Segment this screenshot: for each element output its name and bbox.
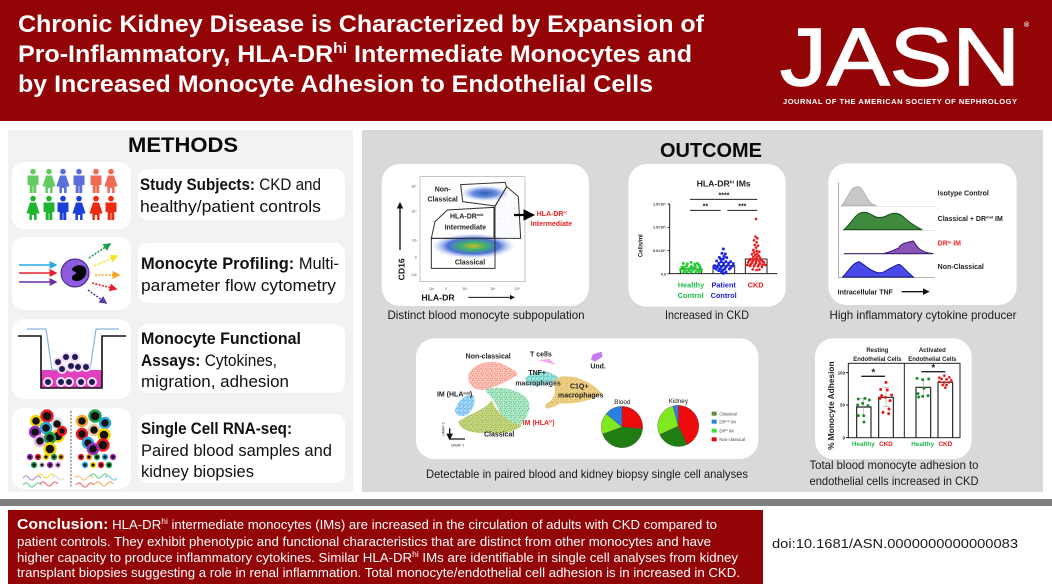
text: study subjects bbox=[140, 176, 321, 216]
title bbox=[18, 11, 705, 98]
chart: flow plot: Classical bbox=[455, 260, 485, 267]
chart: kidney pie: Kidney bbox=[669, 398, 689, 405]
chart: flow plot: 0 bbox=[415, 256, 417, 260]
title: hi bbox=[333, 40, 347, 57]
caption: adhesion bbox=[810, 458, 979, 488]
chart: HLA-DRhi IMs dot plot: *** bbox=[738, 203, 747, 210]
text: study subjects: healthy/patient controls bbox=[140, 198, 321, 216]
chart: UMAP: hi bbox=[549, 420, 552, 424]
chart: monocyte adhesion bars: Activated bbox=[919, 348, 946, 354]
conclusion box: IMs are identifiable in single cell analyses from kidney bbox=[419, 551, 739, 565]
legend: pie: IM bbox=[730, 419, 736, 424]
chart: UMAP: TNF+ bbox=[528, 370, 546, 377]
chart: blood pie bbox=[601, 399, 643, 448]
chart: monocyte adhesion bars: * bbox=[871, 368, 875, 379]
text: functional assays: Monocyte Functional bbox=[141, 330, 301, 348]
chart: intracellular TNF histograms: Isotype Control bbox=[938, 191, 989, 198]
chart: UMAP: T cells bbox=[530, 351, 552, 358]
chart: intracellular TNF histograms: Classical + DR bbox=[938, 216, 986, 223]
chart: flow plot: 10⁵ bbox=[412, 184, 417, 188]
title: Pro-Inflammatory, HLA-DR bbox=[18, 41, 320, 68]
caption: dot plot: Increased in CKD bbox=[665, 308, 749, 322]
chart: HLA-DRhi IMs dot plot: HLA-DR bbox=[697, 179, 730, 189]
text: functional assays bbox=[141, 330, 301, 391]
panel: methods bbox=[8, 130, 353, 492]
chart: UMAP: IM (HLA bbox=[523, 420, 549, 427]
chart: monocyte adhesion bars: Resting bbox=[866, 348, 889, 354]
card: UMAP and pies bbox=[416, 338, 758, 459]
card: adhesion bbox=[815, 338, 972, 459]
chart: UMAP: UMAP 1 bbox=[451, 444, 464, 448]
legend: pie: DR bbox=[719, 419, 726, 424]
chart: flow plot: hi bbox=[563, 211, 567, 215]
chart: flow plot: CD16 bbox=[396, 258, 406, 280]
chart: intracellular TNF histograms: IM bbox=[993, 216, 1003, 223]
legend: pie: hi bbox=[726, 428, 728, 432]
text: single cell RNA-seq: Paired blood samples and bbox=[141, 442, 332, 460]
chart: monocyte adhesion bars: * bbox=[931, 363, 935, 374]
chart: HLA-DRhi IMs dot plot: IMs bbox=[734, 179, 751, 189]
chart: flow plot: Classical bbox=[428, 197, 458, 204]
chart: flow plot: Intermediate bbox=[531, 221, 572, 228]
outcome heading: OUTCOME bbox=[660, 140, 762, 162]
text: single cell RNA-seq bbox=[141, 420, 332, 481]
conclusion box: intermediate monocytes (IMs) are increased in the circulation of adults with CKD compared to bbox=[168, 518, 717, 532]
chart: HLA-DRhi IMs dot plot: Control bbox=[678, 291, 704, 300]
chart: monocyte adhesion bars: CKD bbox=[938, 441, 953, 448]
chart: flow plot: HLA-DR bbox=[450, 213, 477, 220]
chart: UMAP: IM (HLA bbox=[437, 392, 463, 399]
conclusion box: transplant biopsies suggesting a role in renal inflammation. Total monocyte/endothelial cell adhesion is in increased in CKD. bbox=[17, 566, 740, 580]
chart: flow plot: 10⁴ bbox=[490, 287, 496, 291]
chart: UMAP: ) bbox=[552, 420, 555, 427]
card: TNF histograms bbox=[828, 163, 1017, 305]
chart: intracellular TNF histograms: hi bbox=[948, 239, 951, 244]
chart: UMAP: macrophages bbox=[515, 380, 561, 387]
caption: UMAP: Detectable in paired blood and kidney biopsy single cell analyses bbox=[426, 467, 748, 481]
JASN logo: ® bbox=[1024, 21, 1030, 29]
chart: flow plot: Intermediate bbox=[445, 224, 486, 231]
method: monocyte profiling bbox=[12, 237, 345, 310]
conclusion box: hi bbox=[161, 517, 168, 526]
chart: intracellular TNF histograms bbox=[838, 182, 1003, 297]
chart: UMAP: macrophages bbox=[558, 393, 604, 400]
conclusion box: hi bbox=[412, 550, 419, 559]
legend: pie: IM bbox=[728, 428, 734, 433]
chart: flow plot bbox=[396, 177, 572, 303]
chart: monocyte adhesion bars bbox=[826, 348, 960, 450]
caption: histograms: High inflammatory cytokine producer bbox=[830, 308, 1017, 322]
title: Chronic Kidney Disease is Characterized by Expansion of bbox=[18, 11, 705, 38]
chart: intracellular TNF histograms: Intracellular TNF bbox=[838, 290, 894, 297]
text: monocyte profiling: Monocyte Profiling: Multi- bbox=[141, 255, 339, 273]
caption: flow: Distinct blood monocyte subpopulation bbox=[388, 308, 584, 322]
chart: flow plot: HLA-DR bbox=[537, 211, 563, 218]
text: single cell RNA-seq: kidney biopsies bbox=[141, 463, 254, 481]
chart: HLA-DRhi IMs dot plot bbox=[639, 179, 777, 300]
text: study subjects: Study Subjects: CKD and bbox=[140, 176, 321, 194]
chart: HLA-DRhi IMs dot plot: **** bbox=[719, 192, 730, 199]
chart: UMAP: mid bbox=[463, 391, 470, 395]
card: dot plot bbox=[628, 164, 786, 307]
chart: monocyte adhesion bars: CKD bbox=[879, 441, 893, 448]
panel: outcome bbox=[362, 130, 1043, 492]
chart: UMAP: C1Q+ bbox=[570, 383, 588, 390]
caption: adhesion: Total blood monocyte adhesion to bbox=[810, 458, 979, 472]
method: single cell RNA-seq bbox=[12, 408, 345, 489]
chart: blood pie: Blood bbox=[614, 399, 631, 406]
chart: flow plot: 10⁴ bbox=[412, 210, 417, 214]
chart: HLA-DRhi IMs dot plot: CKD bbox=[748, 280, 764, 289]
chart: HLA-DRhi IMs dot plot: 1.0×10⁶ bbox=[653, 226, 666, 230]
title: Intermediate Monocytes and bbox=[347, 41, 692, 68]
icon: transwell bbox=[18, 329, 126, 388]
header banner bbox=[0, 0, 1052, 121]
chart: UMAP: Und. bbox=[590, 363, 606, 370]
chart: intracellular TNF histograms: mid bbox=[986, 215, 994, 220]
JASN logo: JASN bbox=[780, 12, 1020, 103]
text: monocyte profiling bbox=[141, 255, 339, 295]
conclusion box: higher capacity to produce inflammatory cytokines. Similar HLA-DR bbox=[17, 551, 389, 565]
card: flow cytometry gating bbox=[382, 164, 589, 306]
chart: monocyte adhesion bars: % Monocyte Adhesion bbox=[826, 361, 836, 450]
chart: flow plot: HLA-DR bbox=[421, 293, 455, 303]
JASN logo: JOURNAL OF THE AMERICAN SOCIETY OF NEPHROLOGY bbox=[783, 97, 1017, 106]
conclusion box bbox=[8, 510, 763, 584]
method: study subjects bbox=[12, 162, 345, 229]
divider bar bbox=[0, 499, 1052, 506]
chart: monocyte adhesion bars: 50 bbox=[840, 403, 846, 408]
chart: intracellular TNF histograms: DR bbox=[938, 241, 948, 248]
legend: pie: mid bbox=[726, 419, 730, 423]
icon: people bbox=[26, 169, 118, 220]
icon: monocyte with arrows bbox=[19, 244, 119, 303]
chart: flow plot: mid bbox=[477, 213, 483, 217]
chart: flow plot: 0 bbox=[445, 287, 447, 291]
chart: flow plot: 10³ bbox=[412, 238, 418, 242]
chart: UMAP: Non-classical bbox=[466, 353, 511, 360]
legend: pie: Classical bbox=[719, 411, 737, 416]
title: by Increased Monocyte Adhesion to Endothelial Cells bbox=[18, 71, 653, 98]
chart: HLA-DRhi IMs dot plot: 0.0 bbox=[661, 272, 666, 276]
legend: pie bbox=[712, 411, 745, 442]
text: monocyte profiling: parameter flow cytometry bbox=[141, 277, 337, 295]
chart: flow plot: 10³ bbox=[463, 287, 468, 291]
chart: HLA-DRhi IMs dot plot: Healthy bbox=[678, 280, 705, 289]
conclusion box: Conclusion: HLA-DR bbox=[17, 516, 158, 533]
chart: HLA-DRhi IMs dot plot: hi bbox=[730, 180, 734, 185]
chart: monocyte adhesion bars: Endothelial Cells bbox=[853, 357, 902, 363]
chart: flow plot: 10⁵ bbox=[515, 287, 520, 291]
chart: HLA-DRhi IMs dot plot: ** bbox=[703, 203, 708, 210]
chart: monocyte adhesion bars: Healthy bbox=[911, 441, 935, 448]
chart: HLA-DRhi IMs dot plot: 1.5×10⁶ bbox=[653, 202, 666, 206]
icon: single cell clusters bbox=[23, 410, 117, 488]
chart: UMAP bbox=[437, 351, 606, 448]
chart: monocyte adhesion bars: 100 bbox=[838, 370, 846, 375]
chart: flow plot: -10³ bbox=[411, 273, 418, 277]
text: functional assays: migration, adhesion bbox=[141, 373, 289, 391]
methods heading: METHODS bbox=[128, 134, 238, 157]
caption: adhesion: endothelial cells increased in CKD bbox=[810, 474, 979, 488]
doi: doi:10.1681/ASN.0000000000000083 bbox=[772, 536, 1018, 551]
legend: pie: Non-classical bbox=[719, 437, 745, 442]
chart: HLA-DRhi IMs dot plot: Patient bbox=[711, 280, 736, 289]
text: functional assays: Assays: Cytokines, bbox=[141, 352, 277, 370]
chart: intracellular TNF histograms: IM bbox=[951, 241, 961, 248]
chart: HLA-DRhi IMs dot plot: Cells/ml bbox=[639, 234, 645, 257]
method: functional assays bbox=[12, 319, 345, 399]
chart: monocyte adhesion bars: Endothelial Cells bbox=[908, 357, 957, 363]
text: single cell RNA-seq: Single Cell RNA-seq: bbox=[141, 420, 292, 438]
chart: UMAP: UMAP 2 bbox=[441, 422, 445, 436]
chart: monocyte adhesion bars: Healthy bbox=[852, 441, 875, 448]
chart: monocyte adhesion bars: 0 bbox=[843, 435, 846, 440]
chart: UMAP: ) bbox=[470, 392, 472, 399]
legend: pie: DR bbox=[719, 428, 726, 433]
chart: UMAP: Classical bbox=[484, 432, 514, 439]
chart: flow plot: -10³ bbox=[428, 287, 435, 291]
chart: intracellular TNF histograms: Non-Classical bbox=[938, 264, 984, 271]
chart: HLA-DRhi IMs dot plot: 5.0×10⁵ bbox=[653, 249, 666, 253]
chart: kidney pie bbox=[658, 398, 699, 447]
chart: flow plot: Non- bbox=[435, 187, 451, 194]
conclusion box: patient controls. They exhibit phenotypic and functional characteristics that are distinct from other monocytes and have bbox=[17, 535, 711, 549]
chart: HLA-DRhi IMs dot plot: Control bbox=[711, 291, 737, 300]
